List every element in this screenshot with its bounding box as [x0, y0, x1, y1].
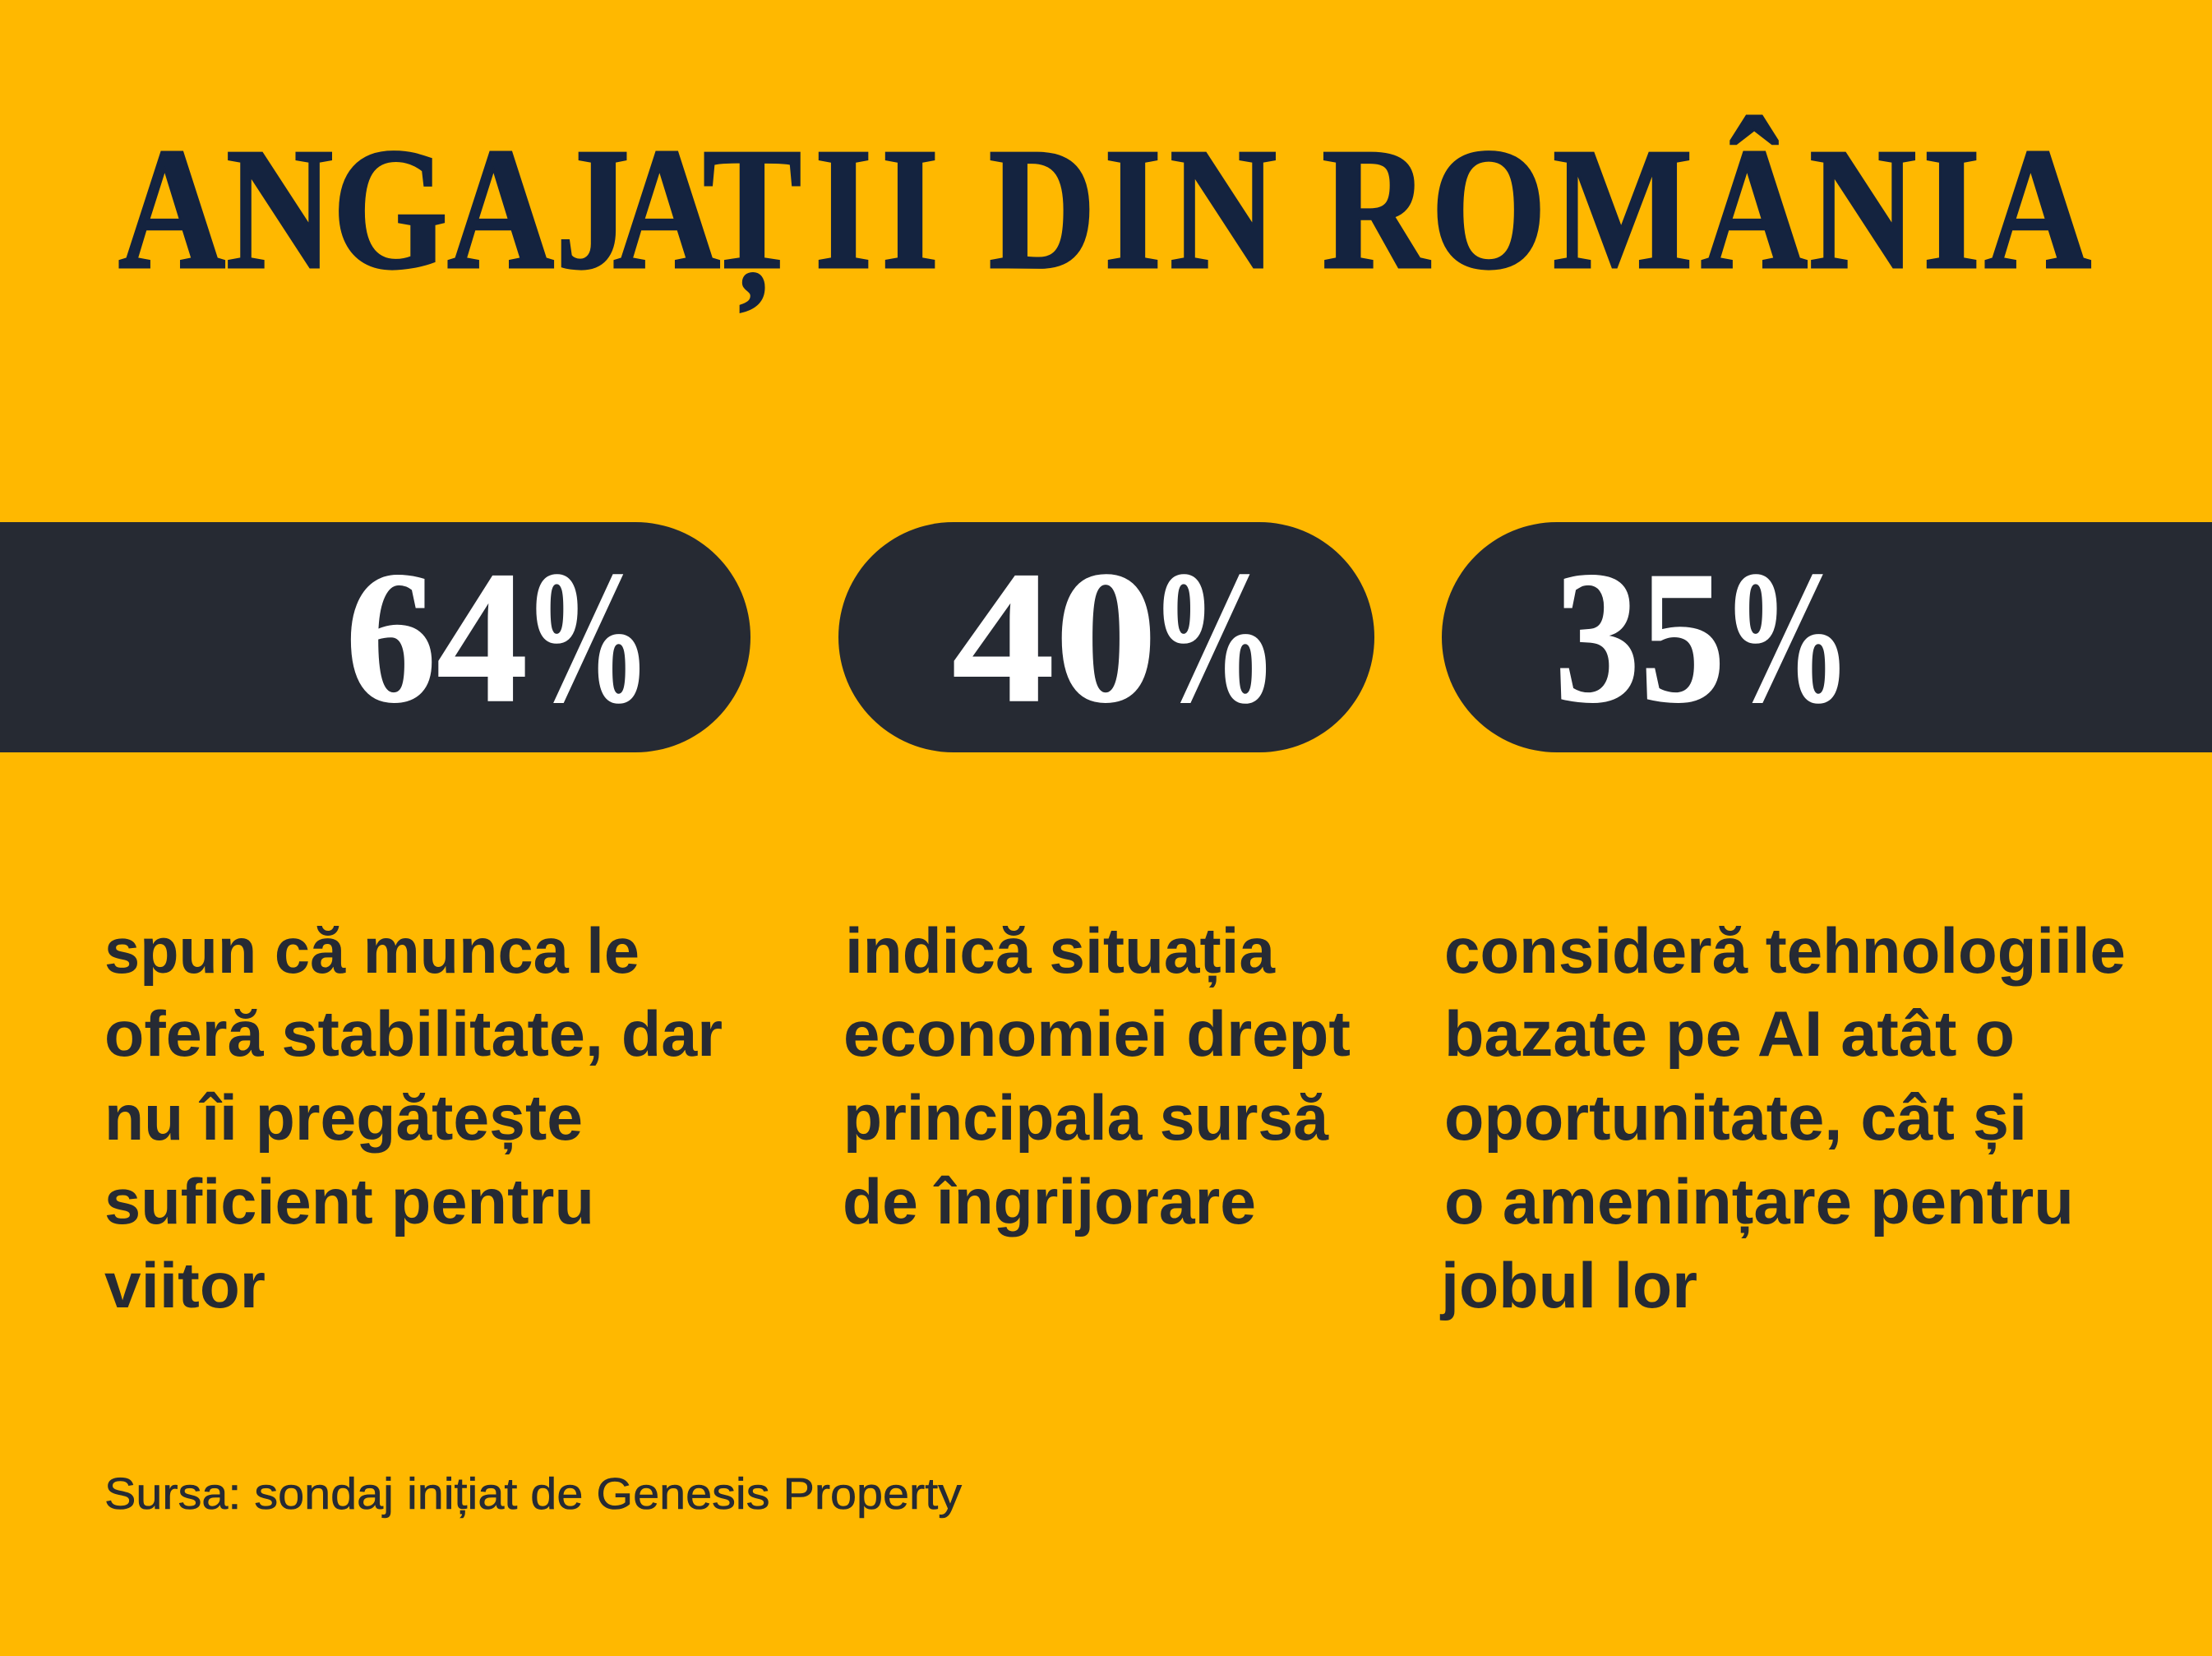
text block: 35% description: bazate pe AI atât o [1444, 997, 2015, 1070]
text block: 35% description: consideră tehnologiile [1444, 914, 2126, 987]
source note: Sursa: sondaj inițiat de Genesis Property [104, 1469, 962, 1519]
number: 40%: % [1151, 532, 1277, 742]
number: 64%: 64 [345, 532, 528, 742]
text block: 35% description: oportunitate, cât și [1444, 1081, 2027, 1155]
number: 64%: % [524, 532, 651, 742]
text block: 64% description: viitor [104, 1249, 266, 1321]
number: 40%: 40 [952, 532, 1157, 742]
text block: 40% description: economiei drept [843, 997, 1351, 1070]
panel: 35% stat [1442, 522, 2212, 752]
text block: 64% description: nu îi pregătește [104, 1081, 583, 1155]
panel: 64% stat [0, 522, 750, 752]
title [118, 112, 2091, 312]
text block: 40% description: principala sursă [843, 1081, 1329, 1154]
number: 35%: 35 [1554, 532, 1725, 742]
number: 40% [952, 532, 1277, 742]
center pill bar [838, 522, 1374, 752]
title: ROMÂNIA [1322, 112, 2091, 305]
text block: 64% description: suficient pentru [104, 1165, 594, 1237]
title: DIN [989, 112, 1277, 305]
panel: 40% stat [838, 522, 1374, 752]
text block: 35% description [1439, 914, 2126, 1321]
text block: 40% description [843, 914, 1351, 1237]
number: 35% [1554, 532, 1851, 742]
text block: 40% description: indică situația [845, 914, 1276, 988]
title: ANGAJAȚII [118, 112, 939, 312]
number: 35%: % [1722, 532, 1851, 742]
text block: 64% description: oferă stabilitate, dar [104, 997, 723, 1070]
text block: 64% description [104, 914, 723, 1321]
number: 64% [345, 532, 651, 742]
text block: 35% description: o amenințare pentru [1444, 1165, 2074, 1239]
text block: 35% description: jobul lor [1439, 1249, 1697, 1321]
left pill bar [0, 522, 750, 752]
right pill bar [1442, 522, 2212, 752]
text block: 64% description: spun că munca le [104, 914, 640, 987]
text block: 40% description: de îngrijorare [843, 1165, 1256, 1237]
